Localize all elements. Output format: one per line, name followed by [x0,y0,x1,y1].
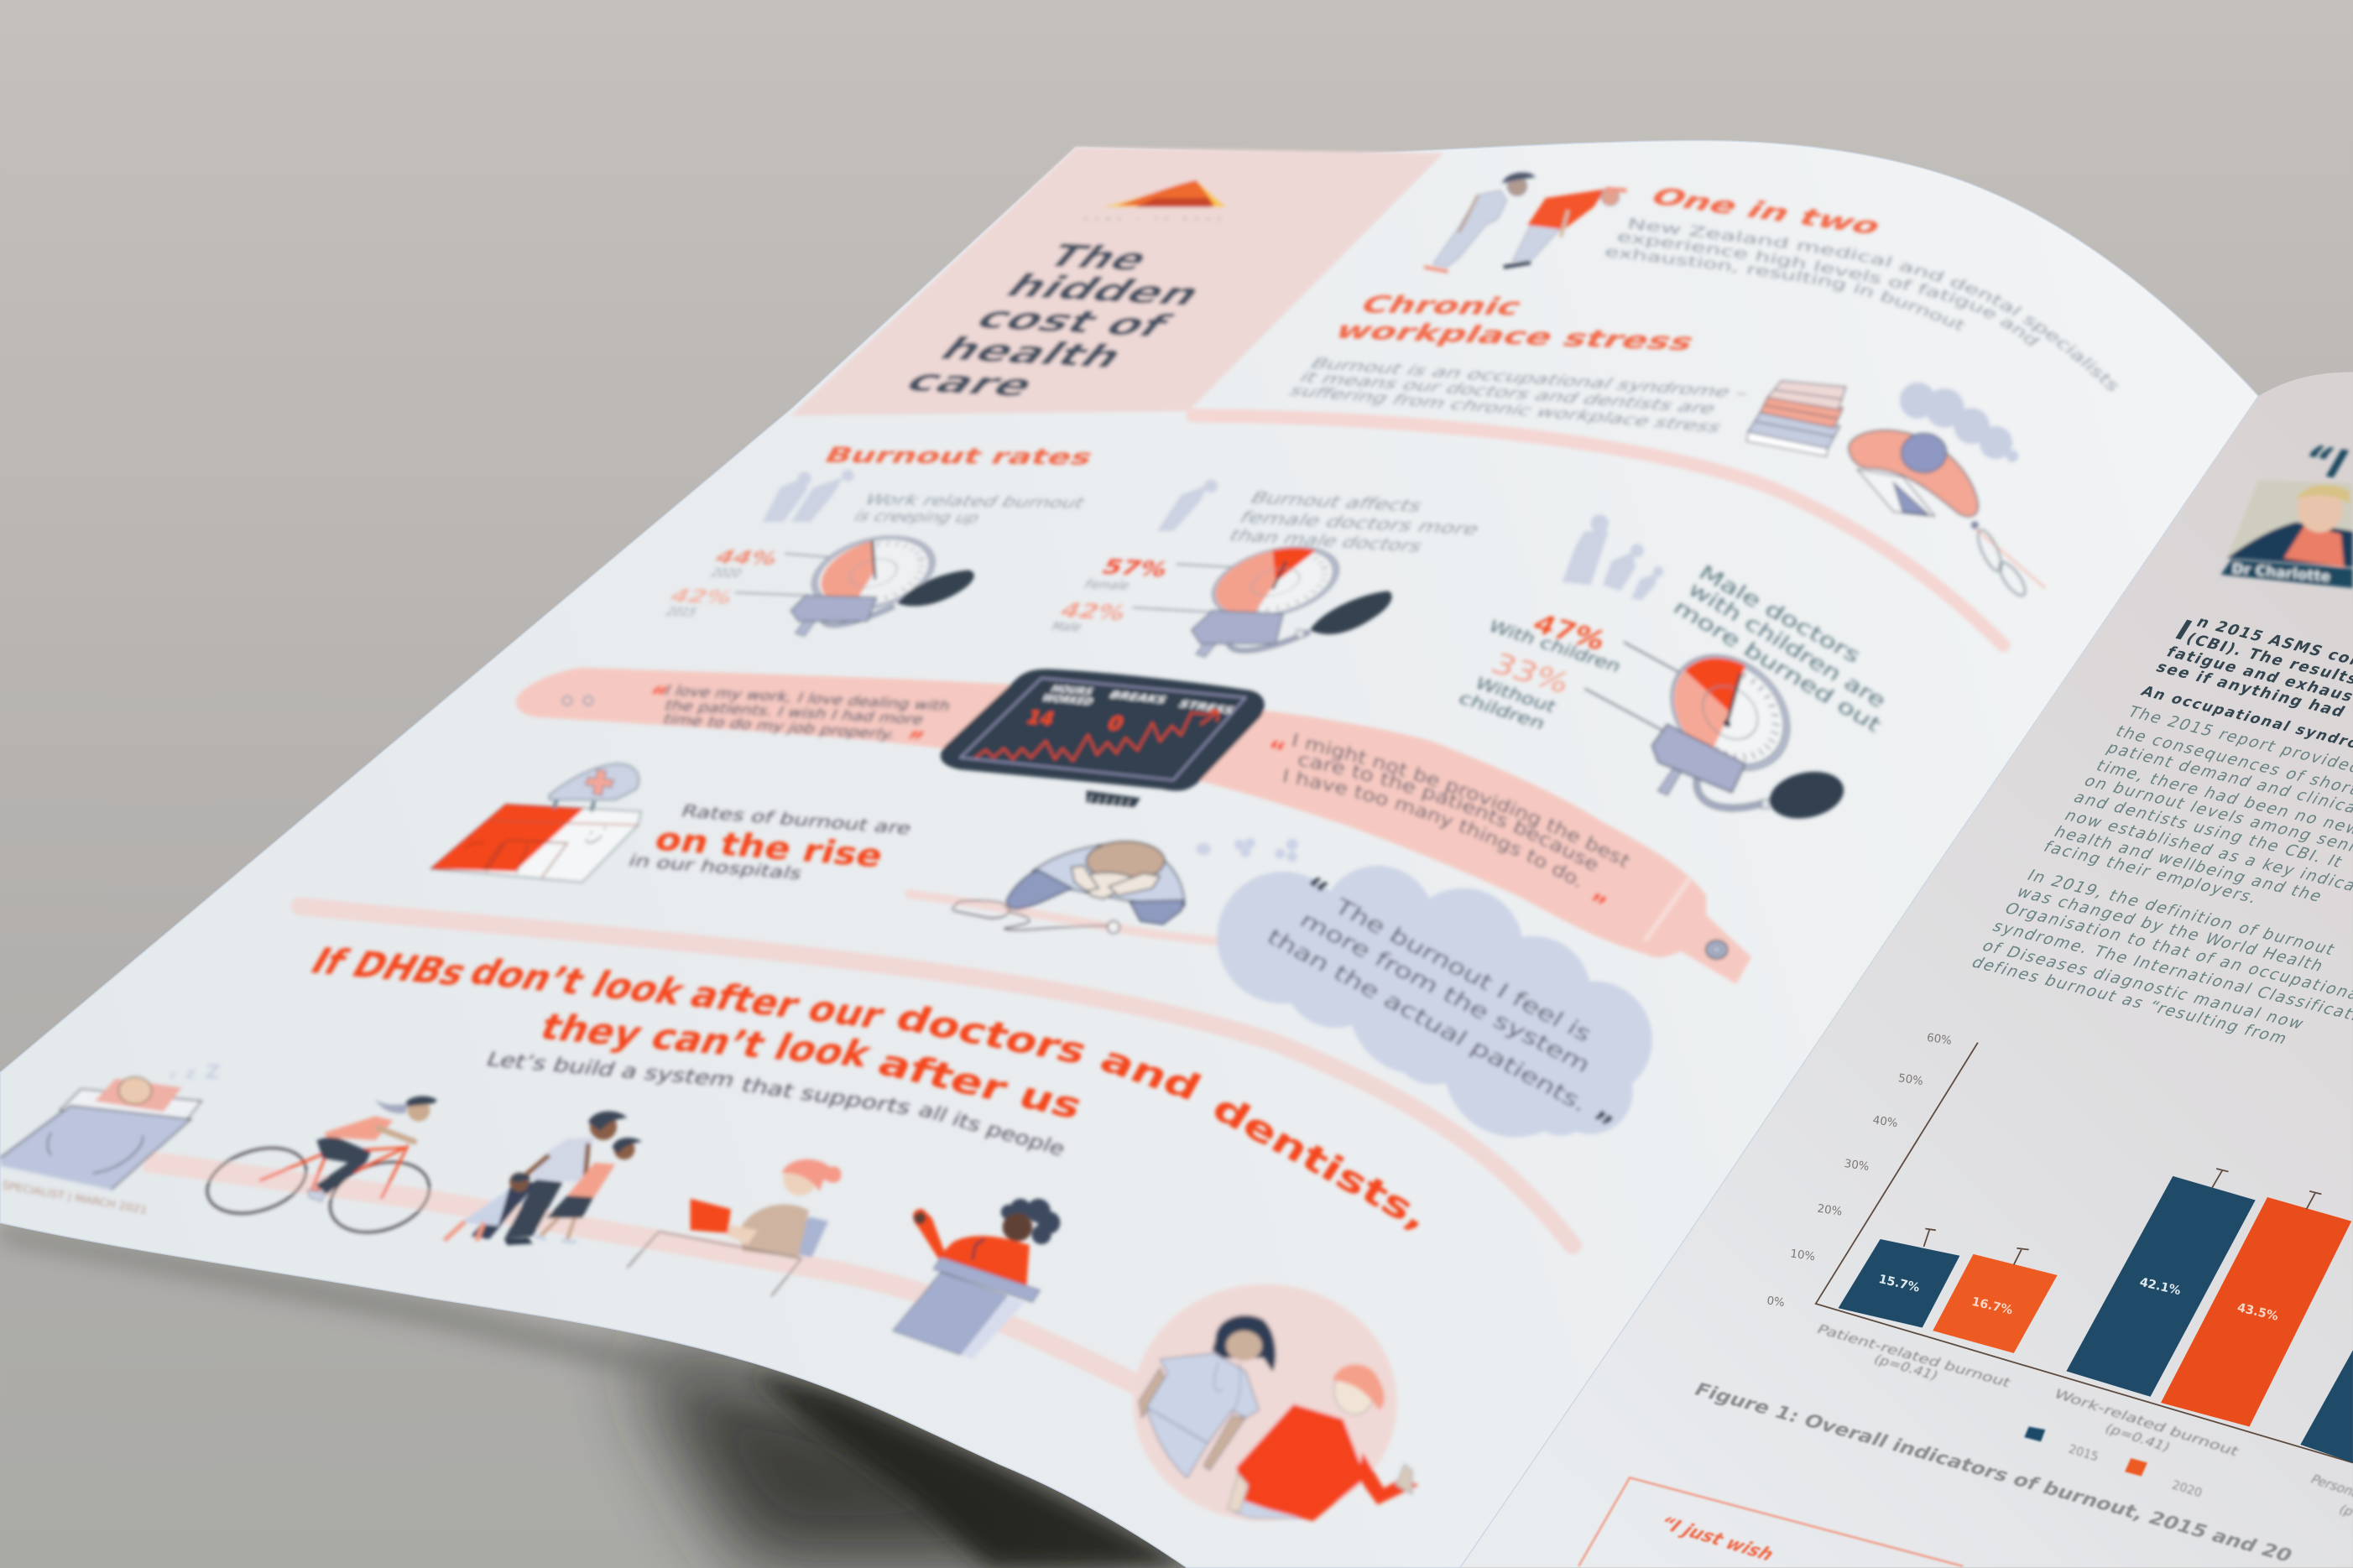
male doctors text: Male doctors [1694,560,1865,668]
intro drop cap and bold standfirst [2137,614,2353,759]
on the rise callout: on the rise [650,820,888,874]
with children stat: 47% [1527,609,1611,656]
on the rise callout: Rates of burnout are [678,801,915,838]
icon: cyclist [199,1096,438,1244]
quote left: “ [640,680,673,711]
title: cost of [966,300,1181,345]
gauge: female versus male [1133,536,1392,657]
icon: nurse standing and doctor bending [1424,173,1626,272]
without children stat [1455,648,1576,733]
icon: stressed woman with books, laptop and cloud [663,381,2045,657]
thought cloud quote: more from the system [1295,908,1595,1078]
body copy: was changed by the World Health [2013,883,2329,976]
gauge labels middle: Male [1049,619,1085,634]
icon: doctor head in hands [1007,841,1184,925]
body copy: and dentists using the CBI. It [2070,788,2348,872]
without children stat: 33% [1485,648,1576,700]
bar values: 16.7% [1970,1295,2014,1318]
thought cloud quote: ” [1580,1102,1619,1147]
without children stat: Without [1472,674,1560,716]
gauge: with versus without children [1584,636,1848,825]
bar values: 15.7% [1877,1273,1921,1295]
sub headline: Let’s build a system [483,1048,738,1091]
page drop shadow [0,1224,1201,1568]
stethoscope [1971,521,2045,599]
burnout affects text: Burnout affects [1246,488,1427,515]
gauge labels left: 2020 [708,567,744,580]
male doctor in red [1228,1364,1418,1521]
portrait caption: Dr Charlotte [2231,560,2331,586]
male doctors text: more burned out [1669,596,1886,737]
male doctors text [1669,560,1891,737]
on the rise callout: in our hospitals [626,851,806,883]
arms and hair [1849,430,1978,516]
quote left [640,680,953,756]
without children stat: children [1455,689,1549,733]
work related burnout text: is creeping up [850,508,983,527]
title: The [1036,238,1160,279]
axis labels [1766,1032,1953,1310]
thought cloud quote: “ [1295,868,1334,913]
chronic stress body: it means our doctors and dentists are [1295,370,1720,417]
silhouettes: two adults [762,470,854,522]
pull quote mark and photo [2221,436,2353,588]
with children stat: With children [1485,617,1625,676]
main takeaway headline: If DHBs [303,940,476,993]
icon: hospital building [430,763,641,882]
burnout affects text: female doctors more [1235,508,1484,539]
bars 2015 and 2020 [1839,1176,2353,1462]
quote right: care to the patients because [1296,754,1599,873]
lower pink band [144,1161,1140,1386]
quote right: I might not be providing the best [1291,732,1631,869]
axes [1816,1043,2353,1462]
axis labels: 30% [1844,1158,1870,1174]
intro drop cap and bold standfirst: see if anything had [2152,659,2350,721]
heading: one in two: One in two [1643,184,1888,240]
main takeaway headline: they can’t look [533,1007,879,1076]
bottom big pink band [300,906,1573,1245]
quote right: I have too many things to do. [1282,768,1579,888]
top pink curved band [1193,415,2003,645]
zzz: z [185,1065,196,1083]
legend: 2020 [2170,1478,2204,1500]
sub headline: that supports [738,1073,915,1119]
hospital monitor: 14 [1023,707,1057,730]
with children stat [1485,609,1625,676]
axis labels: 50% [1897,1072,1924,1088]
gauge labels middle: Female [1082,577,1133,592]
gauge labels middle: 42% [1055,599,1130,625]
body copy: facing their employers. [2040,837,2263,907]
category labels [1814,1322,2353,1519]
chronic stress body: suffering from chronic workplace stress [1285,383,1726,435]
main takeaway headline: doctors [889,998,1094,1072]
right page [1460,372,2353,1568]
title [895,238,1212,404]
hospital monitor: HOURS [1049,683,1095,697]
thought puffs [1196,838,1298,862]
axis labels: 60% [1926,1032,1953,1048]
body copy: defines burnout as “resulting from [1968,953,2293,1048]
thought cloud quote: than the actual patients. [1262,925,1593,1117]
main takeaway headline: after our [683,974,891,1037]
quote box [1578,1477,1963,1566]
intro drop cap and bold standfirst: I [2168,615,2199,647]
figure caption: Figure 1: Overall indicators of burnout, 2015 and 20 [1690,1380,2296,1566]
one in two body: experience high levels of fatigue and [1616,232,2041,347]
bar values [1877,1273,2279,1324]
body copy [1968,702,2353,1048]
quote left: ” [897,726,930,756]
stethoscope chest piece [1108,921,1119,933]
on the rise callout [626,801,915,883]
sub headline [483,1048,1069,1160]
chart category labels, legend and caption [1578,1322,2353,1566]
one in two body: exhaustion, resulting in burnout [1604,247,1965,332]
quote left: the patients. I wish I had more [661,698,926,728]
chronic stress body [1285,356,1753,435]
hospital monitor: 0 [1103,711,1127,735]
legend [2024,1427,2204,1500]
zzz: z [169,1069,176,1081]
heading: burnout rates: Burnout rates [819,443,1098,470]
gauge labels middle: 57% [1097,555,1173,581]
logo: ASMS • TE ROHE [1083,216,1222,225]
category labels: (p=0.41) [2102,1421,2173,1455]
stress cloud [1900,383,2018,462]
quote left: time to do my job properly. [660,711,898,743]
pink cuff band with quotes [516,668,1751,984]
bar chart: burnout indicators [1766,1032,2353,1462]
doctors in circle, slightly out of focus [1133,1284,1418,1521]
stack of books [1747,381,1846,456]
bar values: 42.1% [2138,1276,2182,1298]
bar values: 43.5% [2236,1301,2279,1324]
heading: chronic workplace stress [1328,291,1701,356]
portrait caption [2221,560,2353,588]
silhouettes: father with two children [1563,514,1663,600]
category labels: Patient-related burnout [1814,1322,2014,1390]
legend: 2015 [2067,1442,2100,1464]
zzz: Z [205,1061,221,1084]
main takeaway headline: dentists, [1204,1087,1437,1239]
male doctors text: with children are [1683,577,1891,712]
cuff details: eyelet and strip [563,696,1727,959]
main takeaway headline: don’t look [462,951,693,1013]
title: health [930,331,1134,375]
right page text column [1968,614,2353,1048]
hospital monitor [941,669,1265,807]
axis labels: 40% [1872,1114,1898,1130]
gauge labels left [663,547,783,619]
title: hidden [996,268,1212,313]
middle section of left page, in focus [0,513,1891,1394]
hospital monitor: WORKED [1041,692,1095,707]
gauge labels left: 2015 [663,606,699,619]
title: care [895,362,1046,404]
thought cloud quote: The burnout I feel is [1328,894,1596,1047]
error bars [1924,1169,2321,1264]
icon: woman reading at table [628,1159,841,1296]
main takeaway headline: and [1093,1039,1208,1109]
icon: speaker at podium [893,1199,1060,1359]
gauge: work related burnout [735,526,974,636]
category labels: Work-related burnout [2051,1387,2242,1459]
chronic stress body: Burnout is an occupational syndrome – [1306,356,1753,402]
axis labels: 20% [1817,1203,1843,1219]
axis labels: 0% [1766,1295,1786,1310]
category labels: (p=0.41) [1871,1352,1941,1383]
thought cloud quote [1262,868,1619,1147]
body copy: of Diseases diagnostic manual now [1979,936,2309,1033]
work related burnout text: Work related burnout [860,492,1088,512]
quote right [1263,732,1631,923]
hospital monitor: STRESS [1176,698,1237,716]
burnout affects text: than male doctors [1225,526,1427,555]
gauge labels left: 44% [710,547,783,570]
sub headline: all its people [915,1098,1069,1160]
female doctor [1139,1315,1276,1477]
burnout affects text [1225,488,1484,555]
heading: chronic workplace stress: Chronic [1354,291,1528,321]
heading: chronic workplace stress: workplace stress [1328,317,1701,356]
icon: father with children [446,1112,642,1245]
quote left: I love my work, I love dealing with [661,683,953,715]
zzz [169,1061,221,1084]
panel: pink title block [790,147,1443,415]
logo [1083,180,1226,225]
body copy: health and wellbeing and the [2051,822,2327,905]
hospital monitor: BREAKS [1108,689,1169,706]
laptop [1858,470,1934,516]
icon: person asleep in bed [0,1077,201,1190]
thin pink band behind doctor [910,894,1234,942]
quote right: “ [1263,733,1289,768]
icon: stethoscope on desk [952,901,1108,930]
gauge labels left: 42% [665,586,738,608]
quote box: “I just wish [1656,1513,1777,1565]
work related burnout text [850,492,1088,527]
silhouette: one adult [1157,479,1218,531]
footer credit: SPECIALIST | MARCH 2021 [1,1179,148,1216]
pink circle [1133,1284,1397,1521]
body copy: In 2019, the definition of burnout [2023,866,2340,959]
portrait photo [2227,480,2353,567]
one in two body: New Zealand medical and dental specialists [1627,216,2119,393]
axis labels: 10% [1789,1248,1816,1263]
main takeaway headline [303,940,1437,1239]
quote right: ” [1582,886,1611,923]
gauge labels middle [1049,555,1173,634]
thought cloud [1217,866,1652,1137]
main takeaway headline: after us [871,1043,1089,1128]
